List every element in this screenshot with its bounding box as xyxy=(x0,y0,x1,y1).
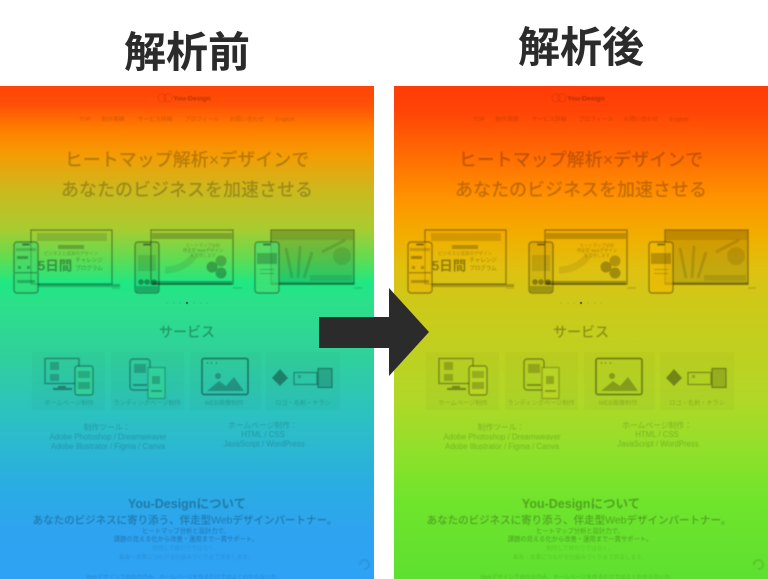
panel: after analysis heatmap xyxy=(394,86,768,579)
hero headline: あなたのビジネスを加速させる xyxy=(61,180,313,200)
site logo: You-Design xyxy=(173,96,211,102)
navigation menu: TOP xyxy=(79,117,91,123)
hero headline: ヒートマップ解析×デザインで xyxy=(65,149,309,170)
tools text: design: 制作ツール： xyxy=(478,422,524,432)
mockup: challenge program: チャレンジ xyxy=(469,257,497,264)
mockup: challenge program: プログラム xyxy=(75,264,103,272)
hero headline: ヒートマップ解析×デザインで xyxy=(459,149,703,170)
tools text: design xyxy=(49,422,167,451)
tools text: coding: HTML / CSS xyxy=(635,430,679,439)
navigation menu xyxy=(473,115,689,123)
card labels: WEB画像制作 xyxy=(205,399,243,407)
mockup: hexagon site xyxy=(135,230,233,293)
hero headline: あなたのビジネスを加速させる xyxy=(455,180,707,200)
mockup: hexagon site: を提供します xyxy=(190,252,216,259)
mockup: hexagon site: を提供します xyxy=(584,252,610,259)
icon: logo and flyer xyxy=(272,368,332,388)
icon: recaptcha badge xyxy=(360,560,369,569)
about section: 制作して終わりではなく、 xyxy=(153,544,219,552)
mockup: challenge program: 5日間 xyxy=(432,258,466,274)
arrow: before to after xyxy=(319,288,429,376)
tools text: design: Adobe Photoshop / Dreamweaver xyxy=(443,432,561,442)
navigation menu: プロフィール xyxy=(579,116,614,123)
mockup: nature site xyxy=(649,230,748,293)
icon: logo and flyer xyxy=(666,368,726,388)
navigation menu: サービス詳細 xyxy=(532,115,567,123)
card labels xyxy=(44,399,331,407)
icon: web image xyxy=(596,358,642,394)
about section: 集客・成果につながる仕組みづくりまで伴走します。 xyxy=(513,553,647,561)
tools text: design: Adobe Illustrator / Figma / Canva xyxy=(51,442,166,451)
about section: ヒートマップ分析と設計力で、 xyxy=(536,526,624,535)
site logo: You-Design xyxy=(567,96,605,102)
navigation menu: 制作実績 xyxy=(101,115,125,123)
about section: 制作して終わりではなく、 xyxy=(547,544,613,552)
icon: landing page xyxy=(524,359,559,398)
mockup: challenge program: プログラム xyxy=(469,264,497,272)
carousel dots xyxy=(560,302,602,304)
navigation menu: English xyxy=(669,117,689,123)
service cards xyxy=(426,352,734,410)
tools text: coding xyxy=(617,420,699,448)
tools text: coding xyxy=(223,420,305,448)
mockup: hexagon site: 伴走型 Webデザイン xyxy=(577,247,617,254)
about section xyxy=(427,497,731,579)
tools text: coding: HTML / CSS xyxy=(241,430,285,439)
card labels: ホームページ制作 xyxy=(44,399,94,407)
mockup: hexagon site xyxy=(529,230,627,293)
device mockups xyxy=(408,230,756,293)
mockup: hexagon site: 伴走型 Webデザイン xyxy=(183,247,223,254)
tools text: design: 制作ツール： xyxy=(84,422,130,432)
section heading: services: サービス xyxy=(159,324,215,340)
card labels: ホームページ制作 xyxy=(438,399,488,407)
icon: landing page xyxy=(130,359,165,398)
tools text: coding: ホームページ制作： xyxy=(228,420,298,430)
navigation menu xyxy=(79,115,295,123)
mockup: hexagon site: ヒートマップ分析 xyxy=(580,242,615,249)
section heading: services: サービス xyxy=(553,324,609,340)
mockup: challenge program: ビジネスと成果のデザイン xyxy=(44,250,98,257)
about section: ヒートマップ分析と設計力で、 xyxy=(142,526,230,535)
navigation menu: お問い合わせ xyxy=(230,115,265,123)
about section xyxy=(33,497,337,579)
tools text: coding: JavaScript / WordPress xyxy=(617,440,699,448)
card labels xyxy=(438,399,725,407)
heading: before analysis: 解析前 xyxy=(124,29,250,76)
device mockups xyxy=(14,230,362,293)
navigation menu: English xyxy=(275,117,295,123)
about section: 集客・成果につながる仕組みづくりまで伴走します。 xyxy=(119,553,253,561)
site logo xyxy=(552,94,605,102)
panel: before analysis heatmap xyxy=(0,86,374,579)
mockup: nature site xyxy=(255,230,354,293)
hero headline xyxy=(61,149,313,200)
navigation menu: プロフィール xyxy=(185,116,220,123)
navigation menu: サービス詳細 xyxy=(138,115,173,123)
card labels: ロゴ・名刺・チラシ xyxy=(275,399,331,407)
navigation menu: お問い合わせ xyxy=(624,115,659,123)
card labels: ロゴ・名刺・チラシ xyxy=(669,399,725,407)
mockup: challenge program: 5日間 xyxy=(38,258,72,274)
mockup: challenge program: チャレンジ xyxy=(75,257,103,264)
mockup: challenge program xyxy=(408,230,514,293)
about section: 課題の見える化から改善・運用まで一貫サポート。 xyxy=(508,534,652,543)
tools text: design xyxy=(443,422,561,451)
icon: homepage xyxy=(439,358,487,395)
tools text: coding: ホームページ制作： xyxy=(622,420,692,430)
heading: after analysis: 解析後 xyxy=(518,24,644,71)
tools text: design: Adobe Illustrator / Figma / Canva xyxy=(445,442,560,451)
about section: You-Designについて xyxy=(522,497,640,511)
mockup: challenge program xyxy=(14,230,120,293)
tools text: design: Adobe Photoshop / Dreamweaver xyxy=(49,432,167,442)
about section: You-Designについて xyxy=(128,497,246,511)
navigation menu: TOP xyxy=(473,117,485,123)
card labels: ランディングページ制作 xyxy=(113,399,181,407)
about section: あなたのビジネスに寄り添う、伴走型Webデザインパートナー。 xyxy=(427,514,731,526)
card labels: ランディングページ制作 xyxy=(507,399,575,407)
card labels: WEB画像制作 xyxy=(599,399,637,407)
icon: recaptcha badge xyxy=(754,560,763,569)
carousel dots xyxy=(166,302,208,304)
mockup: hexagon site: ヒートマップ分析 xyxy=(186,242,221,249)
hero headline xyxy=(455,149,707,200)
mockup: challenge program: ビジネスと成果のデザイン xyxy=(438,250,492,257)
about section: 課題の見える化から改善・運用まで一貫サポート。 xyxy=(114,534,258,543)
tools text: coding: JavaScript / WordPress xyxy=(223,440,305,448)
icon: homepage xyxy=(45,358,93,395)
icon: web image xyxy=(202,358,248,394)
service cards xyxy=(32,352,340,410)
navigation menu: 制作実績 xyxy=(495,115,519,123)
about section: あなたのビジネスに寄り添う、伴走型Webデザインパートナー。 xyxy=(33,514,337,526)
site logo xyxy=(158,94,211,102)
